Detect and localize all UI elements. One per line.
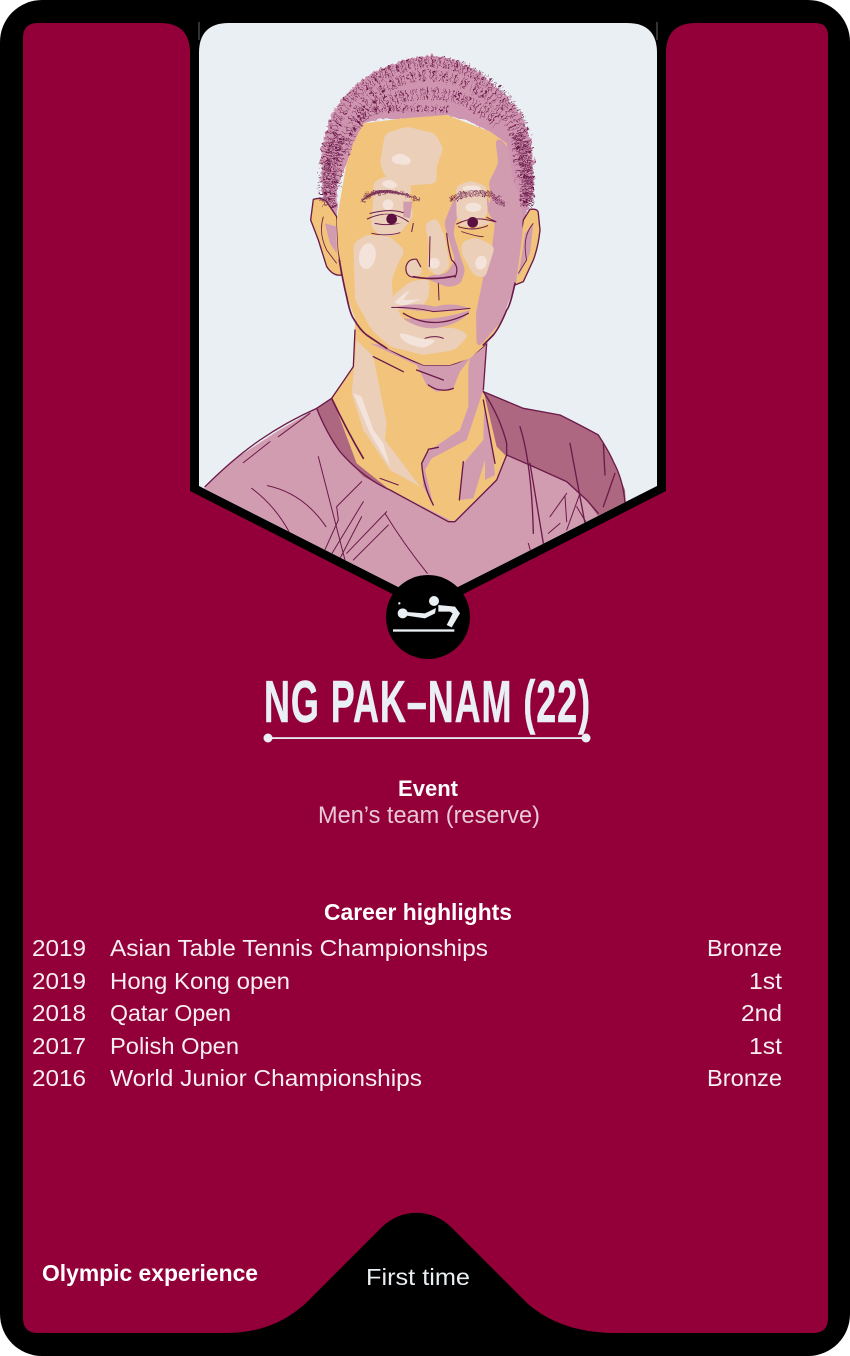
icon: table tennis player xyxy=(393,596,460,632)
face xyxy=(337,115,520,365)
event block: Men’s team (reserve) xyxy=(318,802,540,829)
career highlights table: Bronze xyxy=(707,935,782,961)
career highlights table: 2018 xyxy=(32,1000,86,1026)
eyebrows xyxy=(362,191,505,206)
career highlights table: 2019 xyxy=(32,968,86,994)
face lines xyxy=(339,211,515,348)
shirt and neck lines xyxy=(205,330,625,573)
icon badge xyxy=(386,575,470,659)
portrait panel xyxy=(190,23,657,630)
forehead highlight xyxy=(380,127,443,186)
shirt shaded shoulder xyxy=(483,392,627,517)
career highlights table: Polish Open xyxy=(110,1033,239,1059)
career highlights table: 2016 xyxy=(32,1065,86,1091)
career highlights table: 1st xyxy=(749,968,782,994)
career highlights heading: Career highlights xyxy=(324,899,512,925)
career highlights table: Bronze xyxy=(707,1065,782,1091)
upper lip highlight xyxy=(392,278,430,310)
event block xyxy=(318,776,540,829)
right ear xyxy=(515,209,540,285)
nose highlight xyxy=(425,218,450,277)
hair xyxy=(323,114,528,220)
career highlights table: Qatar Open xyxy=(110,1000,231,1026)
title: NG PAK–NAM (22) xyxy=(264,669,591,735)
career highlights table: World Junior Championships xyxy=(110,1065,422,1091)
illustration: head xyxy=(311,54,540,365)
illustration: torso and neck xyxy=(204,323,626,587)
title underline xyxy=(264,734,590,742)
left ear xyxy=(311,198,342,275)
career highlights table xyxy=(32,935,782,1091)
nose shadow xyxy=(428,198,489,287)
eye area highlights xyxy=(371,176,413,237)
chin highlight xyxy=(400,333,434,348)
cheek highlights xyxy=(353,235,469,355)
olympic experience value: First time xyxy=(366,1264,470,1290)
shirt xyxy=(204,409,598,587)
neck highlight xyxy=(352,340,420,487)
career highlights table: 2nd xyxy=(741,1000,782,1026)
career highlights table: 1st xyxy=(749,1033,782,1059)
event block: Event xyxy=(398,776,459,801)
face shadow xyxy=(476,137,523,350)
career highlights table: Asian Table Tennis Championships xyxy=(110,935,488,961)
hair texture xyxy=(324,62,529,207)
collar xyxy=(317,398,390,490)
left eyebrow base xyxy=(360,190,420,203)
neck shadow xyxy=(422,343,486,505)
hair rough edge xyxy=(320,54,534,223)
neck xyxy=(332,323,507,522)
olympic experience label: Olympic experience xyxy=(42,1260,258,1286)
career highlights table: Hong Kong open xyxy=(110,968,290,994)
lips xyxy=(393,304,469,311)
career highlights table: 2017 xyxy=(32,1033,86,1059)
career highlights table: 2019 xyxy=(32,935,86,961)
frame hairlines xyxy=(199,22,657,40)
eyes xyxy=(370,214,492,228)
